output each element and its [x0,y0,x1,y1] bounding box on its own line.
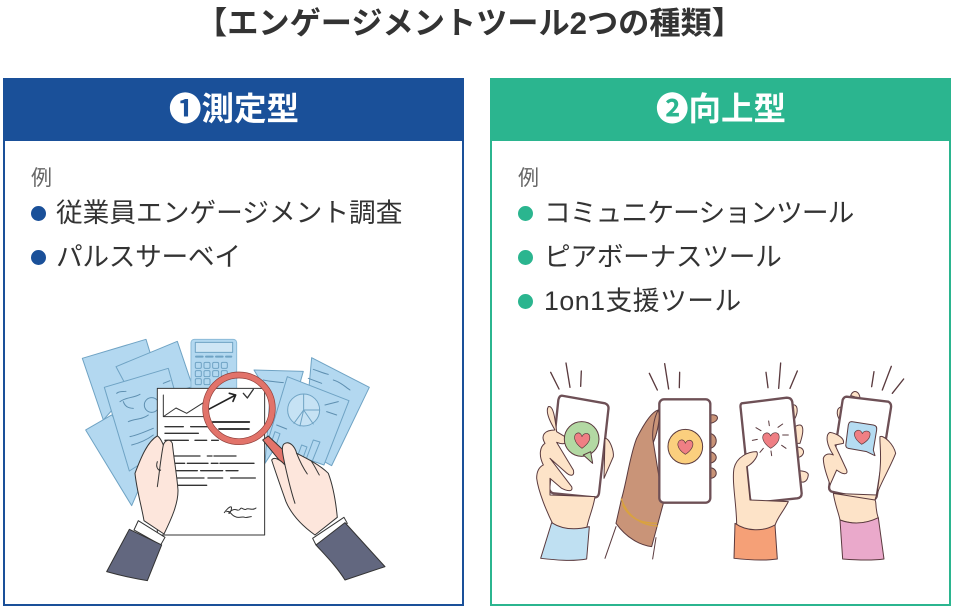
icon: left hand and sleeve [107,436,178,581]
icon: report sheet [157,388,265,535]
list item: pulse survey: パルスサーベイ [56,242,241,272]
heading text: ❶測定型 [169,91,299,127]
list item: communication tool: コミュニケーションツール [544,198,854,228]
example label: 例 [31,167,52,190]
illustration: hands holding phones 3 and 4 [733,363,904,560]
list item: peer bonus tool: ピアボーナスツール [544,242,782,272]
list bullet [518,250,533,265]
list bullet [31,206,46,221]
example label: 例 [518,167,539,190]
illustration: hands holding phones 1 and 2 [537,363,717,560]
list bullet [518,294,533,309]
icon: blue papers right with charts [254,358,369,466]
list bullet [31,250,46,265]
icon: hand with phone and blue speech bubble [823,366,904,560]
list item: 1on1 support tool: 1on1支援ツール [544,286,742,316]
panel heading: measurement type [3,78,464,141]
list item: employee engagement survey: 従業員エンゲージメント調査 [56,198,402,228]
title: 【エンゲージメントツール2つの種類】 [196,6,743,41]
panel heading: improvement type [490,78,951,141]
icon: right hand and sleeve [272,443,385,580]
panel: improvement type [490,78,951,606]
icon: hand with phone and green speech bubble [537,363,613,560]
icon: hand with phone and sparkling heart [733,363,808,560]
icon: magnifying glass [203,372,287,466]
icon: calculator [191,339,237,393]
icon: dark hand with phone and yellow heart [605,364,717,559]
panel: measurement type [3,78,464,606]
list bullet [518,206,533,221]
heading text: ❷向上型 [656,91,786,127]
icon: blue papers left [82,339,193,506]
